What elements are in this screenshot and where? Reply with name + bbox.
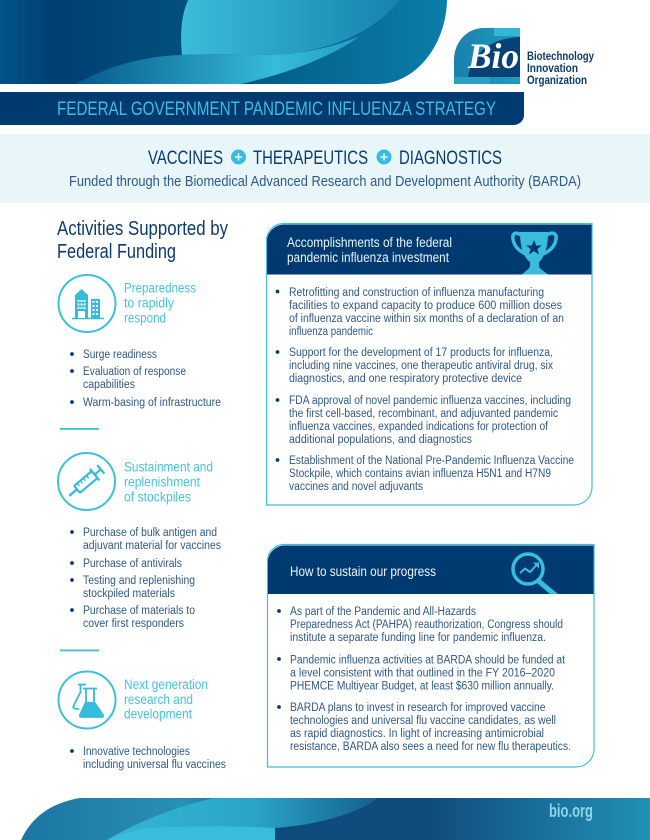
icon: flasks — [58, 672, 116, 728]
panel: accomplishments — [266, 224, 592, 505]
panel header: accomplishments: pandemic influenza investment — [287, 250, 449, 265]
list: preparedness: Evaluation of response — [83, 366, 186, 378]
list: accomplishments: the first cell-based, recombinant, and adjuvanted pandemic — [289, 408, 558, 420]
list: next generation: including universal flu vaccines — [83, 759, 226, 771]
heading: preparedness: to rapidly — [124, 296, 174, 310]
panel header: how to sustain — [268, 546, 594, 594]
list: stockpiles: adjuvant material for vaccines — [83, 540, 221, 552]
subtitle band: Funded through the Biomedical Advanced Research and Development Authority (BARDA) — [69, 174, 581, 190]
header art: swooping blue shapes — [0, 0, 447, 84]
list: accomplishments: diagnostics, and one respiratory protective device — [289, 373, 522, 385]
list: how to sustain: Pandemic influenza activities at BARDA should be funded at — [290, 654, 566, 666]
heading: next generation: research and — [124, 692, 193, 707]
list: stockpiles: Purchase of bulk antigen and — [83, 527, 217, 539]
list: how to sustain: BARDA plans to invest in research for improved vaccine — [290, 702, 546, 714]
list: stockpiles — [70, 527, 221, 630]
subtitle band: VACCINES — [148, 147, 223, 169]
activity: preparedness — [58, 275, 221, 409]
left column heading: Federal Funding — [57, 241, 176, 263]
list: preparedness: Surge readiness — [83, 349, 157, 361]
logo wordmark: Innovation — [527, 61, 578, 75]
activity: stockpiles — [58, 453, 221, 630]
panel: how to sustain — [268, 544, 594, 767]
list: stockpiles: Purchase of materials to — [83, 605, 195, 617]
activity: next generation — [58, 672, 226, 771]
icon: magnifier with trend line — [513, 554, 558, 594]
list: preparedness — [70, 349, 221, 409]
list: stockpiles: Testing and replenishing — [83, 575, 195, 587]
list: how to sustain: technologies and universal flu vaccine candidates, as well — [290, 715, 556, 727]
list: preparedness: capabilities — [83, 379, 135, 391]
list: how to sustain: As part of the Pandemic and All-Hazards — [290, 606, 476, 618]
footer art: swooping blue band — [21, 798, 650, 840]
logo wordmark: Biotechnology — [527, 49, 594, 63]
logo: Bio: Bio — [467, 36, 519, 76]
list: stockpiles: cover first responders — [83, 618, 184, 630]
panel header: accomplishments — [267, 224, 592, 274]
footer url: bio.org — [549, 801, 593, 821]
subtitle band: THERAPEUTICS — [253, 147, 368, 169]
heading: preparedness: Preparedness — [124, 280, 196, 296]
list: how to sustain: resistance, BARDA also sees a need for new flu therapeutics. — [290, 741, 571, 753]
list: accomplishments: Support for the development of 17 products for influenza, — [289, 347, 553, 359]
list: accomplishments: influenza vaccines, expanded indications for protection of — [289, 421, 549, 433]
heading: next generation: development — [124, 706, 192, 722]
left column heading — [57, 218, 228, 263]
title banner — [0, 92, 524, 125]
list: stockpiles: stockpiled materials — [83, 588, 175, 600]
icon: syringe — [58, 453, 115, 510]
icon: buildings — [58, 275, 116, 332]
list: accomplishments: of influenza vaccine within six months of a declaration of an — [289, 313, 564, 325]
list: how to sustain: as rapid diagnostics. In light of increasing antimicrobial — [290, 728, 544, 740]
heading: preparedness: respond — [124, 310, 166, 326]
list: how to sustain — [277, 606, 571, 753]
list: accomplishments — [276, 287, 574, 493]
list: stockpiles: Purchase of antivirals — [83, 558, 182, 570]
heading: next generation: Next generation — [124, 677, 208, 692]
heading: preparedness — [124, 280, 196, 326]
icon: trophy — [513, 232, 556, 274]
list: how to sustain: a level consistent with that outlined in the FY 2016–2020 — [290, 668, 555, 680]
heading: next generation — [124, 677, 208, 722]
list: how to sustain: institute a separate funding line for pandemic influenza. — [290, 632, 546, 644]
panel header: how to sustain: How to sustain our progress — [290, 564, 436, 579]
list: next generation: Innovative technologies — [83, 746, 190, 758]
left column heading: Activities Supported by — [57, 218, 228, 240]
heading: stockpiles — [124, 460, 213, 504]
list: accomplishments: Stockpile, which contains avian influenza H5N1 and H7N9 — [289, 468, 551, 480]
list: accomplishments: Establishment of the National Pre-Pandemic Influenza Vaccine — [289, 455, 574, 467]
list: how to sustain: PHEMCE Multiyear Budget, at least $630 million annually. — [290, 680, 554, 692]
title banner: FEDERAL GOVERNMENT PANDEMIC INFLUENZA STRATEGY — [57, 99, 496, 120]
list: how to sustain: Preparedness Act (PAHPA) reauthorization, Congress should — [290, 619, 563, 631]
panel header: accomplishments: Accomplishments of the federal — [287, 235, 452, 250]
heading: stockpiles: replenishment — [124, 474, 200, 490]
list: accomplishments: facilities to expand capacity to produce 600 million doses — [289, 300, 562, 312]
list: accomplishments: including nine vaccines, one therapeutic antiviral drug, six — [289, 360, 553, 372]
list: accomplishments: Retrofitting and construction of influenza manufacturing — [289, 287, 544, 299]
subtitle band — [0, 134, 650, 203]
logo: Bio — [454, 28, 520, 84]
list: accomplishments: additional populations, and diagnostics — [289, 434, 472, 446]
list: accomplishments: vaccines and novel adjuvants — [289, 481, 423, 493]
logo wordmark: Organization — [527, 73, 587, 87]
logo wordmark — [527, 49, 594, 87]
list: accomplishments: FDA approval of novel pandemic influenza vaccines, including — [289, 395, 571, 407]
list: preparedness: Warm-basing of infrastructure — [83, 397, 221, 409]
subtitle band: DIAGNOSTICS — [399, 147, 502, 169]
list: next generation — [70, 746, 226, 771]
list: accomplishments: influenza pandemic — [289, 326, 373, 338]
heading: stockpiles: Sustainment and — [124, 460, 213, 474]
heading: stockpiles: of stockpiles — [124, 490, 191, 504]
